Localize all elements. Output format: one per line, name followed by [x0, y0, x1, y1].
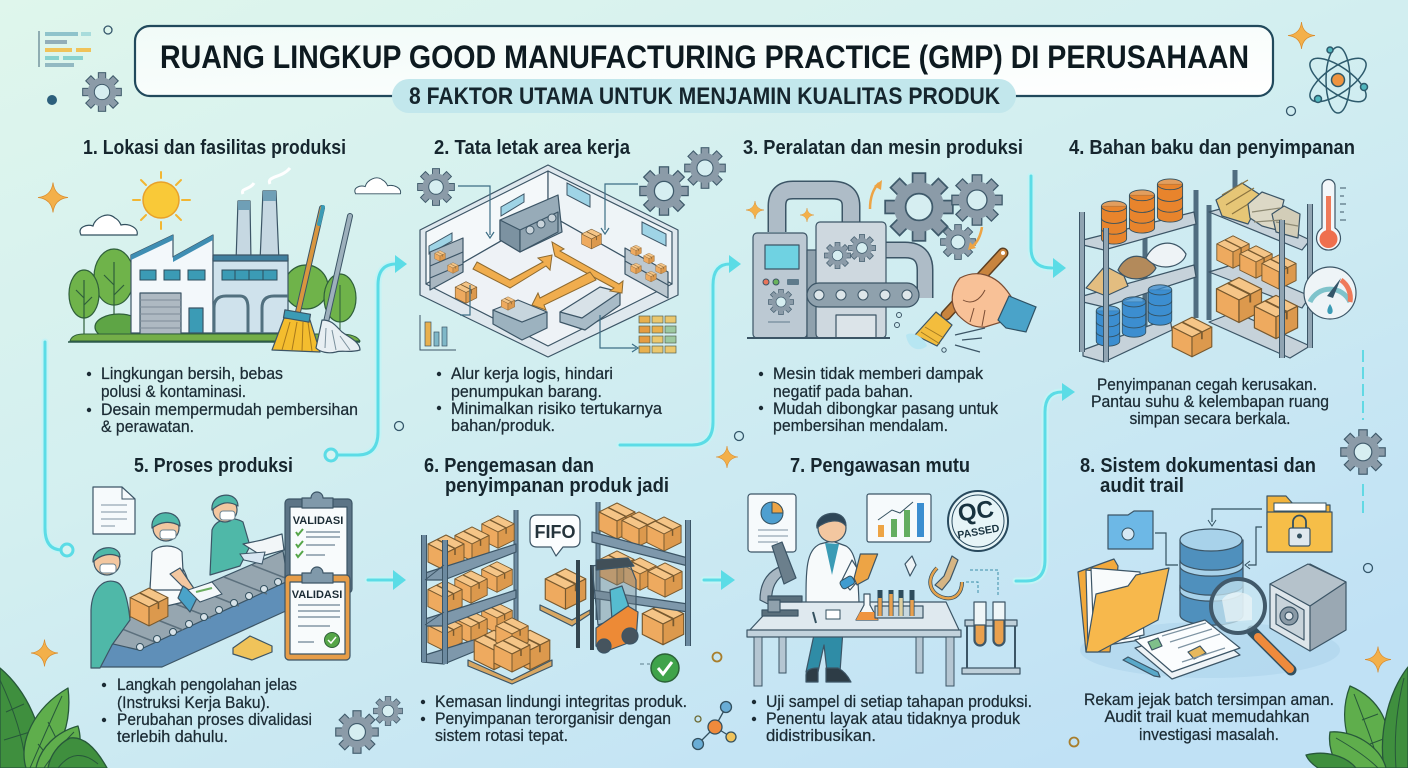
decorative circle [695, 716, 701, 722]
illustration: laboratory: PASSED [957, 522, 1001, 542]
heading 8 [1080, 454, 1316, 497]
text block 6: Penyimpanan terorganisir dengan [435, 710, 671, 728]
illustration: production line [91, 487, 352, 668]
heading 6: penyimpanan produk jadi [445, 474, 669, 497]
icon: star left [31, 640, 58, 666]
illustration: warehouse with forklift: FIFO [534, 522, 576, 542]
icon: star top right [1288, 22, 1315, 49]
text block 6: sistem rotasi tepat. [435, 727, 568, 745]
illustration: documents, database and safe [1078, 496, 1346, 679]
heading 8: audit trail [1100, 474, 1184, 497]
text block 8: Rekam jejak batch tersimpan aman. [1084, 691, 1334, 709]
text block 5: (Instruksi Kerja Baku). [117, 694, 270, 712]
text block 5: Perubahan proses divalidasi [117, 711, 312, 729]
decorative circle [1070, 738, 1078, 746]
illustration: production line: VALIDASI [293, 515, 343, 527]
text block 7 [752, 693, 1032, 745]
title box [135, 26, 1273, 96]
decorative circle [394, 422, 404, 430]
title text: RUANG LINGKUP GOOD MANUFACTURING PRACTICE (GMP) DI PERUSAHAAN [160, 39, 1249, 75]
plant bottom right [1306, 667, 1408, 768]
icon: gear right [1341, 430, 1385, 474]
gears lower middle [336, 696, 402, 753]
text block 5: terlebih dahulu. [117, 728, 228, 746]
connectors between steps [45, 176, 1363, 590]
text block 3 [759, 365, 999, 435]
subtitle pill [392, 79, 1016, 113]
heading 8: 8. Sistem dokumentasi dan [1080, 454, 1316, 477]
text block 2: bahan/produk. [451, 417, 555, 435]
panel 7: quality control [747, 454, 1032, 745]
text block 4: Penyimpanan cegah kerusakan. [1097, 376, 1317, 394]
heading 6: 6. Pengemasan dan [424, 454, 594, 477]
heading 2: 2. Tata letak area kerja [434, 136, 631, 159]
text block 1: Lingkungan bersih, bebas [101, 365, 283, 383]
text block 3: negatif pada bahan. [773, 383, 913, 401]
icon: star middle [716, 446, 738, 468]
heading 4: 4. Bahan baku dan penyimpanan [1069, 136, 1355, 159]
decorative circle [1364, 564, 1372, 572]
decorative dot [47, 95, 57, 105]
decorative circle [104, 26, 112, 34]
heading 6 [424, 454, 669, 497]
panel 8: documentation and audit trail [1078, 454, 1346, 744]
heading 5: 5. Proses produksi [134, 454, 293, 477]
text block 1 [87, 365, 358, 436]
text block 2: penumpukan barang. [451, 383, 602, 401]
illustration: machine and brush [746, 173, 1036, 352]
text block 4: Pantau suhu & kelembapan ruang [1091, 393, 1329, 411]
icon: molecule [692, 702, 736, 750]
text block 6: Kemasan lindungi integritas produk. [435, 693, 687, 711]
text block 8: investigasi masalah. [1139, 726, 1279, 744]
text block 5: Langkah pengolahan jelas [117, 676, 297, 694]
plant bottom left [0, 668, 107, 768]
text block 7: Uji sampel di setiap tahapan produksi. [766, 693, 1032, 711]
illustration: production line: VALIDASI [292, 589, 342, 601]
text block 3: Mesin tidak memberi dampak [773, 365, 984, 383]
text block 3: pembersihan mendalam. [773, 417, 948, 435]
decorative circle [1286, 106, 1296, 116]
panel 6: packaging and finished goods [421, 454, 688, 745]
icon: star bottom right [1365, 646, 1391, 672]
text block 2: Alur kerja logis, hindari [451, 365, 613, 383]
illustration: laboratory [747, 491, 1020, 686]
panel 5: production process [91, 454, 352, 746]
icon: atom [1304, 47, 1372, 113]
text block 3: Mudah dibongkar pasang untuk [773, 400, 999, 418]
panel 2: work area layout [418, 136, 725, 435]
text block 5 [102, 676, 312, 746]
text block 2: Minimalkan risiko tertukarnya [451, 400, 663, 418]
text block 1: & perawatan. [101, 418, 194, 436]
illustration: laboratory: QC [956, 496, 996, 527]
heading 3: 3. Peralatan dan mesin produksi [743, 136, 1023, 159]
text block 6 [421, 693, 687, 745]
decorative top-left data bars [39, 31, 91, 67]
illustration: factory [38, 168, 401, 353]
text block 1: polusi & kontaminasi. [101, 383, 246, 401]
decorative circle [734, 432, 744, 440]
text block 8 [1084, 691, 1334, 744]
text block 7: didistribusikan. [766, 727, 876, 745]
panel 4: raw materials and storage [1069, 136, 1356, 428]
icon: gear top-left [83, 73, 121, 111]
heading 1: 1. Lokasi dan fasilitas produksi [83, 136, 346, 159]
text block 2 [437, 365, 663, 435]
panel 3: equipment and machines [743, 136, 1036, 435]
text block 4: simpan secara berkala. [1130, 410, 1290, 428]
text block 7: Penentu layak atau tidaknya produk [766, 710, 1021, 728]
heading 7: 7. Pengawasan mutu [790, 454, 970, 477]
illustration: warehouse with forklift [422, 502, 688, 684]
panel 1: location and facilities [38, 136, 401, 436]
illustration: storage racks [1082, 170, 1356, 362]
decorative circle [712, 652, 722, 662]
text block 8: Audit trail kuat memudahkan [1104, 708, 1310, 726]
text block 1: Desain mempermudah pembersihan [101, 401, 358, 419]
illustration: isometric floor plan [418, 148, 725, 357]
subtitle text: 8 FAKTOR UTAMA UNTUK MENJAMIN KUALITAS PRODUK [409, 83, 1001, 110]
text block 4 [1091, 376, 1329, 428]
